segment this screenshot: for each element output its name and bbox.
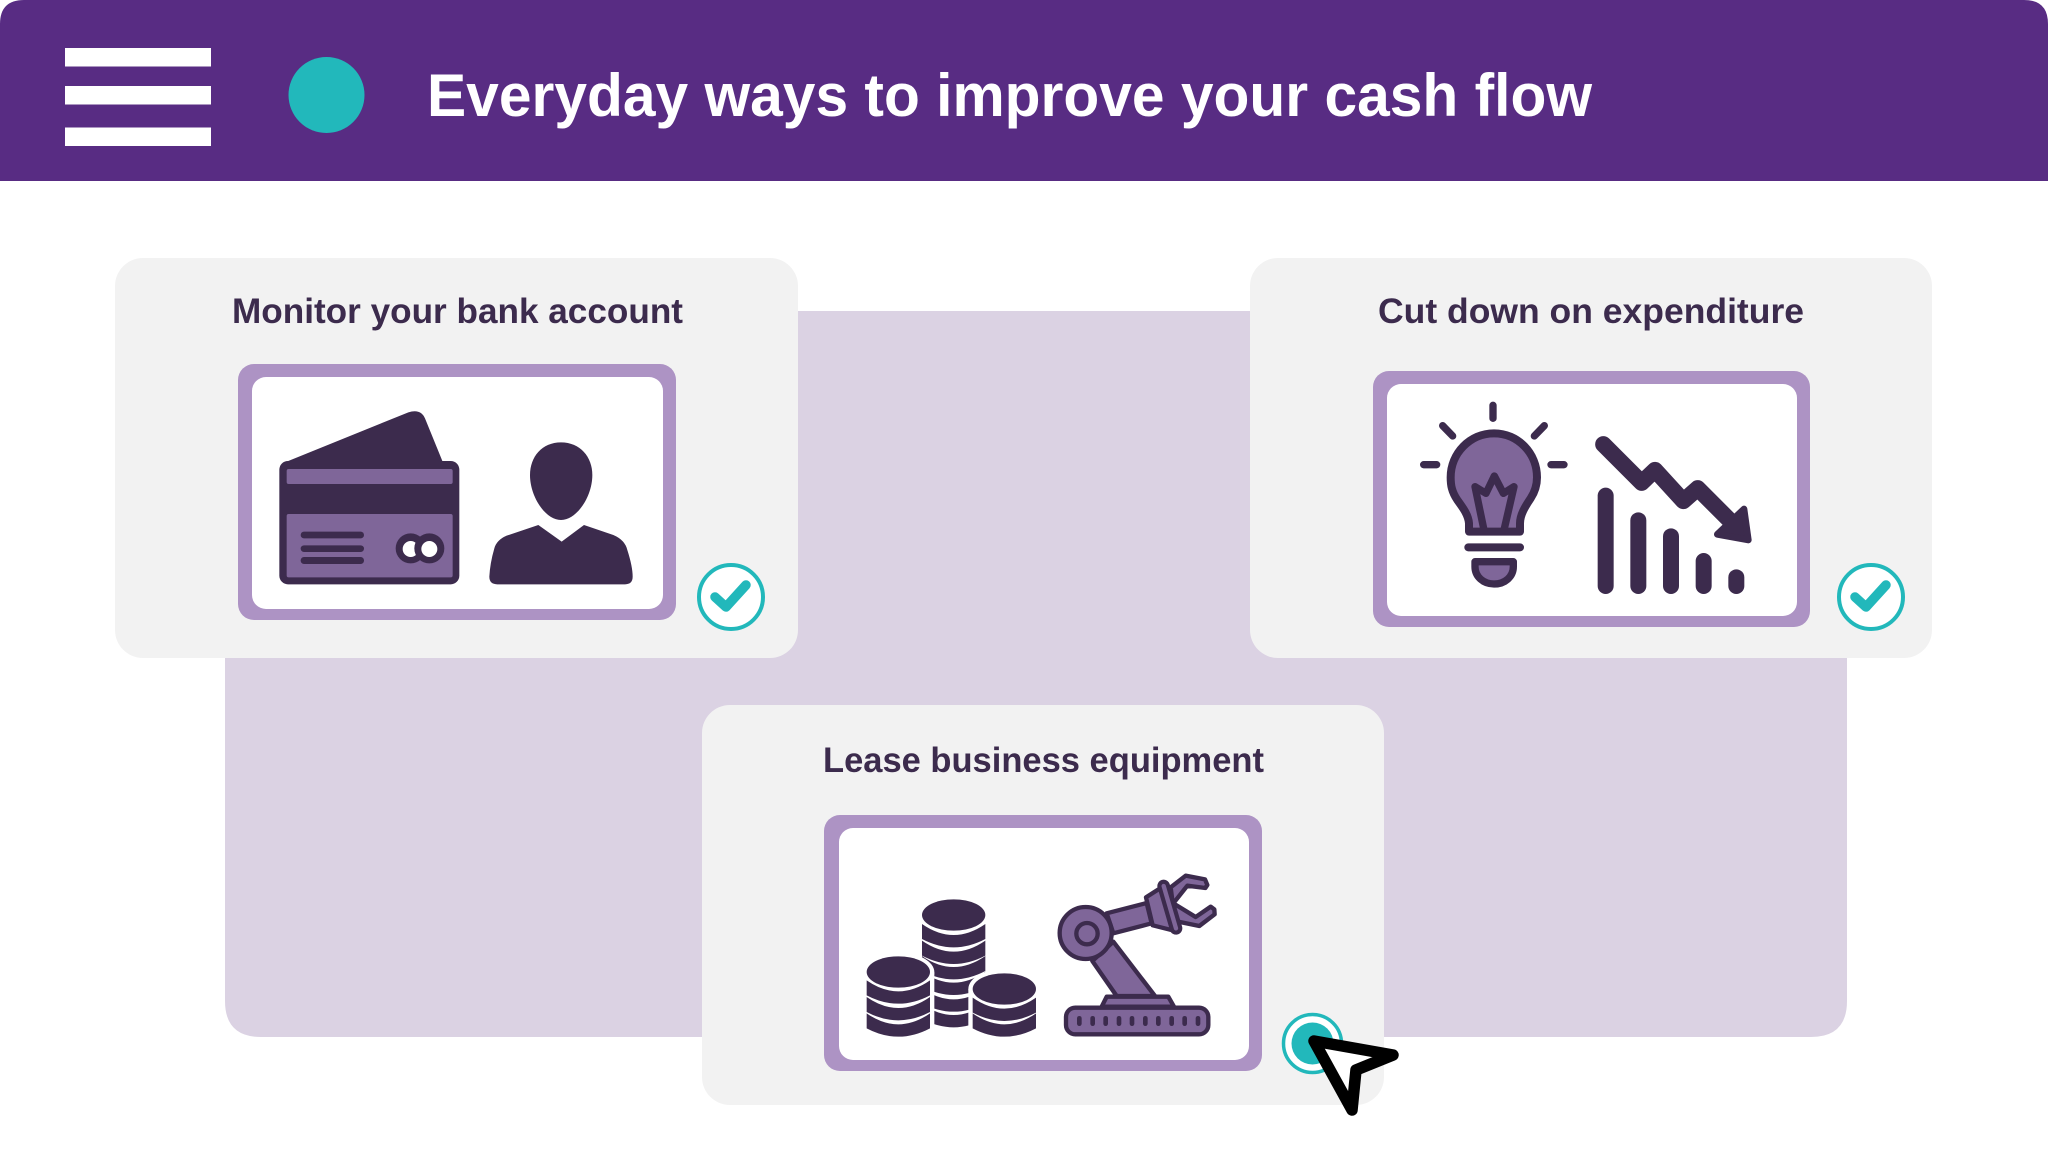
header bar bbox=[0, 0, 2048, 181]
icon: mouse cursor arrow bbox=[1314, 1041, 1393, 1110]
panel: monitor your bank account bbox=[115, 258, 798, 658]
title: Everyday ways to improve your cash flow bbox=[427, 62, 1592, 129]
image frame bbox=[824, 815, 1262, 1071]
image frame bbox=[1373, 371, 1810, 627]
icon: teal status dot bbox=[288, 57, 364, 133]
panel: cut down on expenditure bbox=[1250, 258, 1932, 658]
icon: robot arm bbox=[1060, 876, 1215, 1034]
image frame bbox=[238, 364, 676, 620]
icon: check badge bbox=[1839, 565, 1903, 629]
icon: person bbox=[489, 442, 633, 584]
icon: credit card bbox=[279, 411, 459, 584]
panel: lease business equipment bbox=[702, 705, 1384, 1105]
icon: falling bar chart bbox=[1598, 444, 1748, 594]
icon: coin stacks bbox=[862, 899, 1040, 1041]
icon: selected radio dot bbox=[1284, 1014, 1342, 1072]
background lilac panel bbox=[225, 311, 1847, 1037]
icon: hamburger menu bbox=[65, 48, 211, 146]
heading: cut down on expenditure: Cut down on expenditure bbox=[1378, 292, 1804, 331]
heading: monitor your bank account: Monitor your bank account bbox=[232, 292, 683, 331]
icon: light bulb bbox=[1424, 405, 1564, 584]
icon: check badge bbox=[699, 565, 763, 629]
heading: lease business equipment: Lease business equipment bbox=[823, 741, 1264, 780]
